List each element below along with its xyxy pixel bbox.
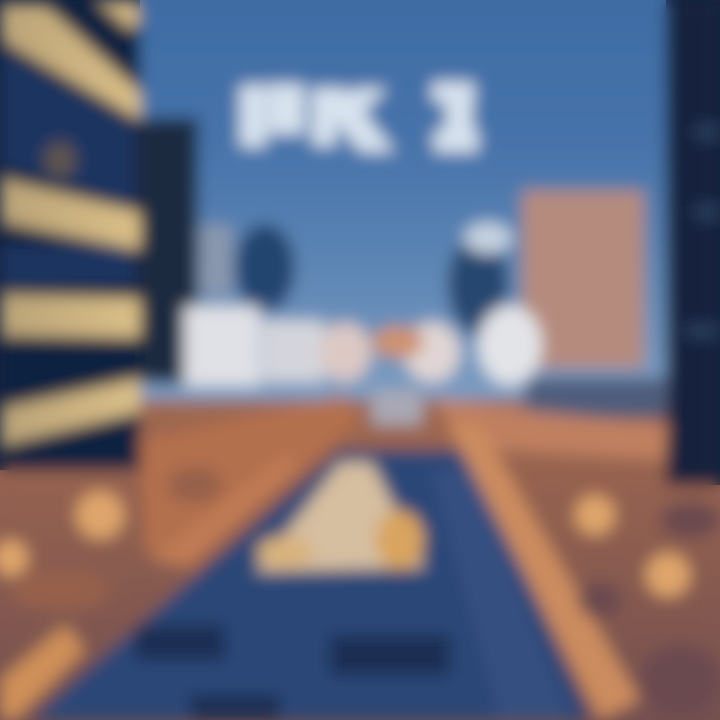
bottom dark shapes bbox=[135, 625, 450, 720]
dark tree right bbox=[448, 235, 508, 335]
pale tree top bbox=[464, 222, 512, 254]
ground base bbox=[0, 400, 720, 720]
right dark tower bbox=[666, 0, 720, 485]
dark tree left bbox=[235, 224, 295, 312]
central grey pylon bbox=[372, 390, 422, 425]
lower white sign bbox=[184, 305, 542, 386]
left dark tower bbox=[140, 118, 198, 383]
central orange glow bbox=[372, 326, 424, 358]
right orange walkway bbox=[435, 398, 668, 460]
left building bbox=[0, 0, 140, 470]
right tower window lights bbox=[685, 125, 720, 337]
central road bbox=[30, 450, 590, 720]
left bottom glow bbox=[0, 625, 85, 720]
upper white sign bbox=[240, 82, 478, 152]
grey low building right bbox=[525, 378, 665, 418]
grey building mid left bbox=[200, 225, 232, 295]
left building blue panels bbox=[0, 50, 135, 285]
right ground dark patches bbox=[578, 502, 720, 715]
road lighter right side bbox=[430, 470, 570, 720]
left building stripes bbox=[0, 0, 140, 446]
left walkway bright edge bbox=[150, 455, 300, 565]
left orange walkway bbox=[140, 395, 360, 570]
pink building right bbox=[522, 190, 644, 368]
right road edge light bbox=[448, 425, 640, 720]
left building window accent bbox=[44, 142, 76, 178]
central reflection bbox=[255, 462, 425, 572]
left walkway dark mottling bbox=[10, 467, 223, 610]
street lights bbox=[0, 491, 690, 597]
